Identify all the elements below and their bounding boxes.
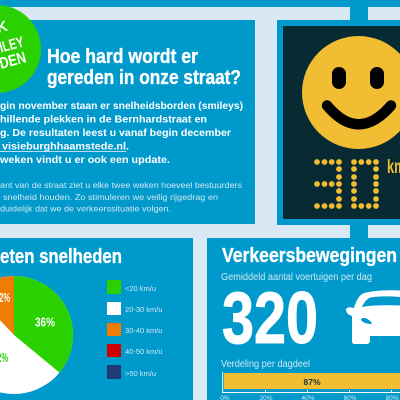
icon: car bbox=[346, 290, 400, 344]
text block: explanation: duidelijk dat we de verkeerssituatie volgen. bbox=[0, 204, 171, 214]
speed display: 30 bbox=[314, 159, 379, 209]
subheading: per part of day: Verdeling per dagdeel bbox=[221, 359, 310, 370]
big number: 320 bbox=[222, 278, 318, 359]
panel: measured speeds bbox=[0, 238, 193, 400]
text block: bold announcement: visieburghhaamstede.nl. bbox=[2, 140, 129, 152]
legend: >50 km/u bbox=[125, 369, 156, 378]
icon: smiley face bbox=[302, 36, 400, 149]
panel: intro bbox=[0, 20, 255, 224]
text block: bold announcement: hillende plekken in de Bernhardstraat en bbox=[0, 114, 207, 126]
text block: bold announcement: g. De resultaten leest u vanaf begin december bbox=[0, 127, 231, 139]
bar chart: 87% bbox=[303, 377, 321, 387]
pie chart bbox=[0, 276, 73, 394]
text block: explanation: snelheid houden. Zo stimuleren we veilig rijgedrag en bbox=[3, 192, 218, 202]
heading: speeds: eten snelheden bbox=[0, 246, 122, 268]
text block: explanation bbox=[0, 180, 242, 214]
panel: traffic movements bbox=[207, 238, 400, 400]
text block: bold announcement: weken vindt u er ook een update. bbox=[0, 154, 170, 166]
subheading: daily average: Gemiddeld aantal voertuigen per dag bbox=[221, 272, 372, 283]
panel: smiley sign bbox=[277, 20, 400, 225]
text block: explanation: ant van de straat ziet u elke twee weken hoeveel bestuurders bbox=[0, 180, 242, 190]
text block: bold announcement bbox=[0, 100, 243, 166]
legend: 20-30 km/u bbox=[125, 305, 163, 314]
text block: bold announcement: gin november staan er snelheidsborden (smileys) bbox=[0, 100, 243, 112]
pie chart: 36% bbox=[35, 314, 55, 330]
heading: main question: Hoe hard wordt er bbox=[47, 46, 198, 68]
heading: main question: gereden in onze straat? bbox=[47, 67, 241, 89]
heading: main question bbox=[47, 46, 241, 89]
badge: green circle bbox=[0, 5, 41, 93]
legend: <20 km/u bbox=[125, 284, 156, 293]
bar chart bbox=[220, 372, 400, 400]
legend: 30-40 km/u bbox=[125, 326, 163, 335]
legend: 40-50 km/u bbox=[125, 347, 163, 356]
legend bbox=[107, 280, 163, 379]
